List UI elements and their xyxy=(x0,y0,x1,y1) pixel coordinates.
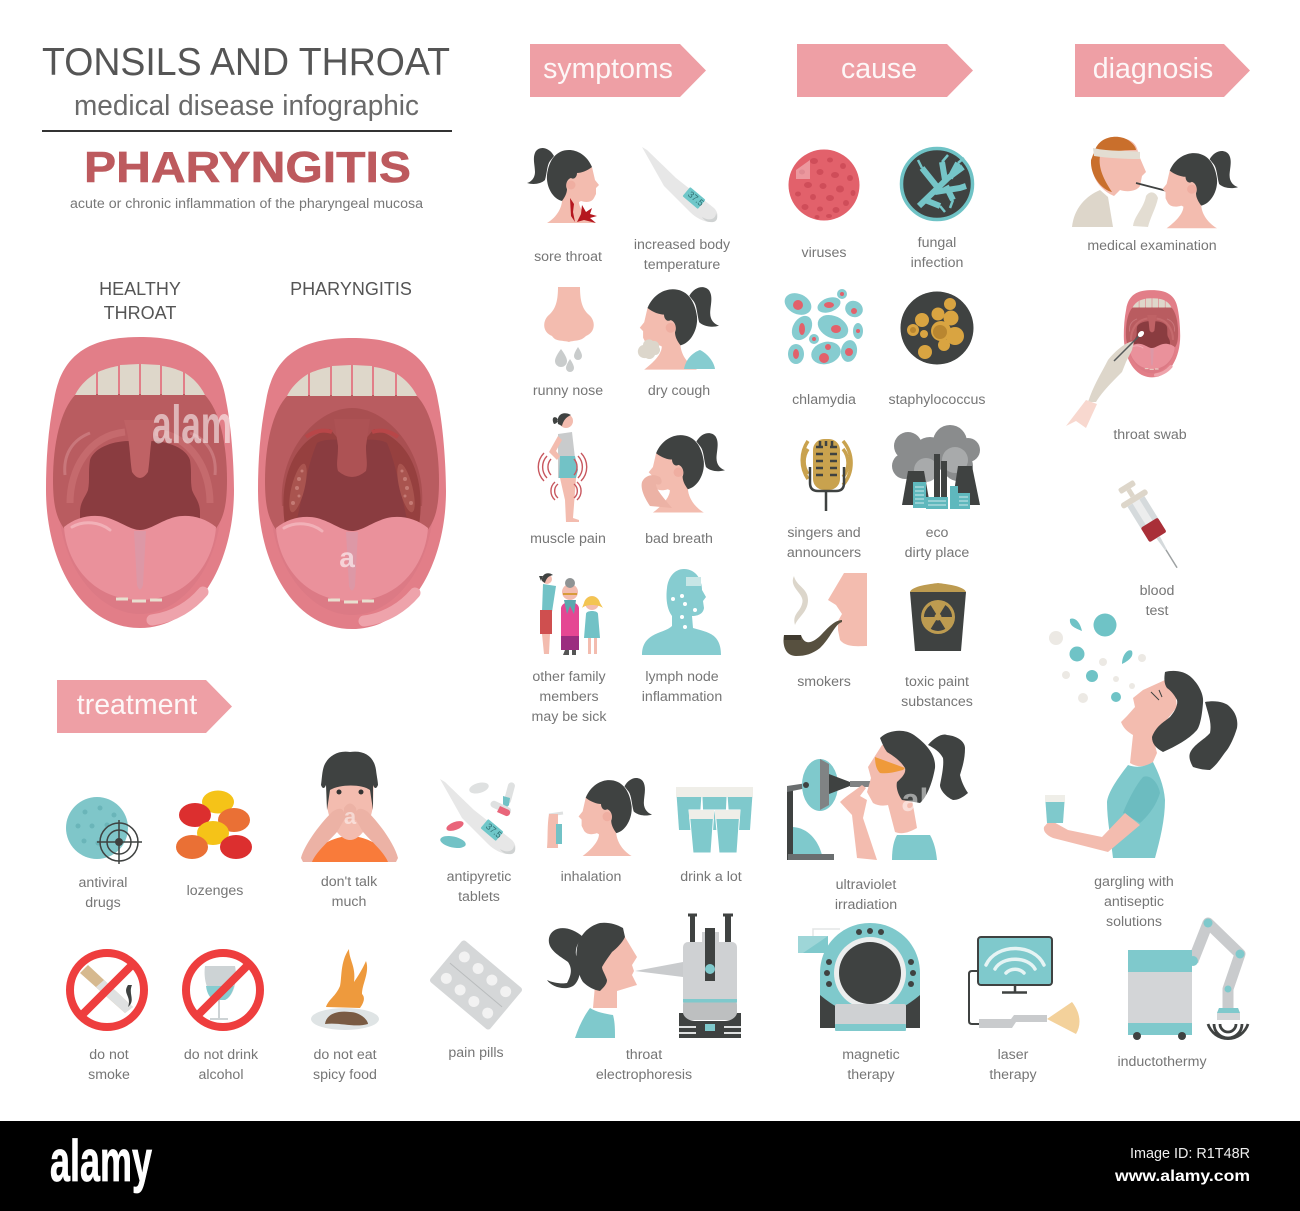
label xyxy=(88,1047,130,1083)
label: increased body xyxy=(634,237,731,253)
icon: don't talk much xyxy=(301,752,398,862)
panel: cause xyxy=(781,148,986,710)
icon: ultraviolet irradiation: al xyxy=(902,782,928,818)
icon: medical examination xyxy=(1072,137,1238,228)
icon: lymph node inflammation xyxy=(642,569,721,655)
image id: Image ID: R1T48R xyxy=(1130,1146,1250,1162)
label: lozenges xyxy=(187,883,243,899)
icon: don't talk much: a xyxy=(344,804,357,829)
disease heading: PHARYNGITIS xyxy=(84,143,411,192)
icon: thermometer xyxy=(642,147,717,222)
label: inflammation xyxy=(642,689,722,705)
label: eco xyxy=(926,525,949,541)
label: throat xyxy=(626,1047,662,1063)
icon: gargling with antiseptic solutions xyxy=(1044,614,1237,858)
label xyxy=(321,874,378,910)
label xyxy=(596,1047,692,1083)
label: drink a lot xyxy=(680,869,742,885)
label: staphylococcus xyxy=(888,392,986,408)
label xyxy=(313,1047,377,1083)
icon: chlamydia xyxy=(781,289,866,368)
icon: inductothermy xyxy=(1128,918,1248,1040)
label: substances xyxy=(901,694,973,710)
icon: bad breath xyxy=(642,433,725,513)
ribbon: diagnosis: diagnosis xyxy=(1093,53,1213,85)
label: chlamydia xyxy=(792,392,856,408)
icon: antiviral drugs xyxy=(66,797,142,864)
icon: viruses xyxy=(788,150,860,220)
icon: smokers xyxy=(784,573,867,656)
label xyxy=(1140,583,1174,619)
ribbon: cause: cause xyxy=(841,53,917,85)
heading: healthy throat line two: THROAT xyxy=(104,303,176,323)
illustration: pharyngitis mouth xyxy=(258,338,446,629)
label: magnetic xyxy=(842,1047,900,1063)
label: inductothermy xyxy=(1117,1054,1207,1070)
label: runny nose xyxy=(533,383,603,399)
label: electrophoresis xyxy=(596,1067,692,1083)
label: do not drink xyxy=(184,1047,259,1063)
label xyxy=(835,877,897,913)
icon: inhalation xyxy=(547,778,652,856)
icon: throat swab xyxy=(1066,290,1180,428)
label: antiseptic xyxy=(1104,894,1164,910)
label xyxy=(642,669,722,705)
watermark: alam xyxy=(152,395,232,455)
panel: diagnosis xyxy=(1044,137,1238,930)
label: pain pills xyxy=(448,1045,504,1061)
label xyxy=(184,1047,259,1083)
icon: laser therapy xyxy=(969,937,1079,1034)
icon: staphylococcus xyxy=(900,292,974,364)
label xyxy=(905,525,969,561)
label xyxy=(79,875,127,911)
label: drugs xyxy=(85,895,121,911)
label: inhalation xyxy=(561,869,621,885)
label: infection xyxy=(911,255,963,271)
label xyxy=(911,235,963,271)
icon: pain pills xyxy=(429,939,523,1031)
panel: treatment xyxy=(66,731,1248,1083)
icon: ultraviolet irradiation xyxy=(787,731,968,860)
watermark: a xyxy=(339,542,355,573)
label: announcers xyxy=(787,545,861,561)
icon: do not eat spicy food xyxy=(311,949,379,1030)
icon: sore throat xyxy=(527,148,599,223)
label: lymph node xyxy=(645,669,719,685)
icon: muscle pain xyxy=(538,413,587,522)
icon: magnetic therapy xyxy=(798,923,920,1031)
heading: healthy throat: HEALTHY xyxy=(99,279,181,299)
label: fungal xyxy=(918,235,956,251)
definition: acute or chronic inflammation of the pharyngeal mucosa xyxy=(70,196,423,212)
label: spicy food xyxy=(313,1067,377,1083)
label xyxy=(634,237,731,273)
heading: pharyngitis: PHARYNGITIS xyxy=(290,279,412,299)
label: may be sick xyxy=(532,709,607,725)
label: much xyxy=(332,894,366,910)
title block xyxy=(42,41,452,212)
label: viruses xyxy=(802,245,846,261)
label: dry cough xyxy=(648,383,710,399)
label: sore throat xyxy=(534,249,602,265)
label xyxy=(447,869,511,905)
icon: do not drink alcohol xyxy=(186,953,260,1027)
icon: antipyretic tablets xyxy=(439,779,516,854)
label: irradiation xyxy=(835,897,897,913)
icon: fungal infection xyxy=(902,148,972,220)
label: laser xyxy=(998,1047,1029,1063)
icon: other family members xyxy=(539,573,603,655)
label: singers and xyxy=(787,525,861,541)
icon: lozenges xyxy=(176,790,252,859)
label: test xyxy=(1146,603,1168,619)
ribbon: symptoms: symptoms xyxy=(543,53,673,85)
icon: do not smoke xyxy=(70,953,144,1027)
label: muscle pain xyxy=(530,531,606,547)
label: tablets xyxy=(458,889,500,905)
label: antipyretic xyxy=(447,869,511,885)
label xyxy=(787,525,861,561)
icon: blood test xyxy=(1113,477,1190,576)
icon: runny nose xyxy=(544,287,594,372)
label: smoke xyxy=(88,1067,130,1083)
label xyxy=(842,1047,900,1083)
label: dirty place xyxy=(905,545,969,561)
label xyxy=(901,674,973,710)
ribbon: treatment: treatment xyxy=(77,689,197,721)
label: smokers xyxy=(797,674,851,690)
icon: throat electrophoresis xyxy=(547,915,741,1038)
subtitle: medical disease infographic xyxy=(74,90,419,122)
logo: alamy xyxy=(50,1129,152,1194)
label: alcohol xyxy=(199,1067,243,1083)
label xyxy=(1094,874,1174,930)
label: antiviral xyxy=(79,875,127,891)
label: throat swab xyxy=(1113,427,1187,443)
label: therapy xyxy=(847,1067,896,1083)
label: toxic paint xyxy=(905,674,969,690)
label: gargling with xyxy=(1094,874,1174,890)
label xyxy=(532,669,607,725)
label: solutions xyxy=(1106,914,1162,930)
label: blood xyxy=(1140,583,1174,599)
label: do not xyxy=(89,1047,129,1063)
illustration: healthy mouth xyxy=(46,337,234,628)
ribbon: cause xyxy=(797,44,973,97)
icon: drink a lot xyxy=(676,787,753,853)
label: don't talk xyxy=(321,874,378,890)
label: temperature xyxy=(644,257,720,273)
label: do not eat xyxy=(313,1047,377,1063)
panel: throat comparison xyxy=(46,279,446,629)
label: bad breath xyxy=(645,531,713,547)
label: medical examination xyxy=(1087,238,1217,254)
title: TONSILS AND THROAT xyxy=(42,41,450,84)
icon: singers and announcers xyxy=(802,439,851,511)
label: therapy xyxy=(989,1067,1038,1083)
ribbon: symptoms xyxy=(530,44,706,97)
label: members xyxy=(539,689,599,705)
icon: dry cough xyxy=(638,287,719,370)
icon: toxic paint substances xyxy=(910,583,966,651)
label xyxy=(989,1047,1038,1083)
ribbon: treatment xyxy=(57,680,232,733)
website: www.alamy.com xyxy=(1114,1168,1250,1185)
label: ultraviolet xyxy=(836,877,896,893)
panel: symptoms xyxy=(527,147,731,725)
ribbon: diagnosis xyxy=(1075,44,1250,97)
icon: eco dirty place xyxy=(892,425,980,509)
label: other family xyxy=(532,669,607,685)
footer bar xyxy=(0,1121,1300,1211)
